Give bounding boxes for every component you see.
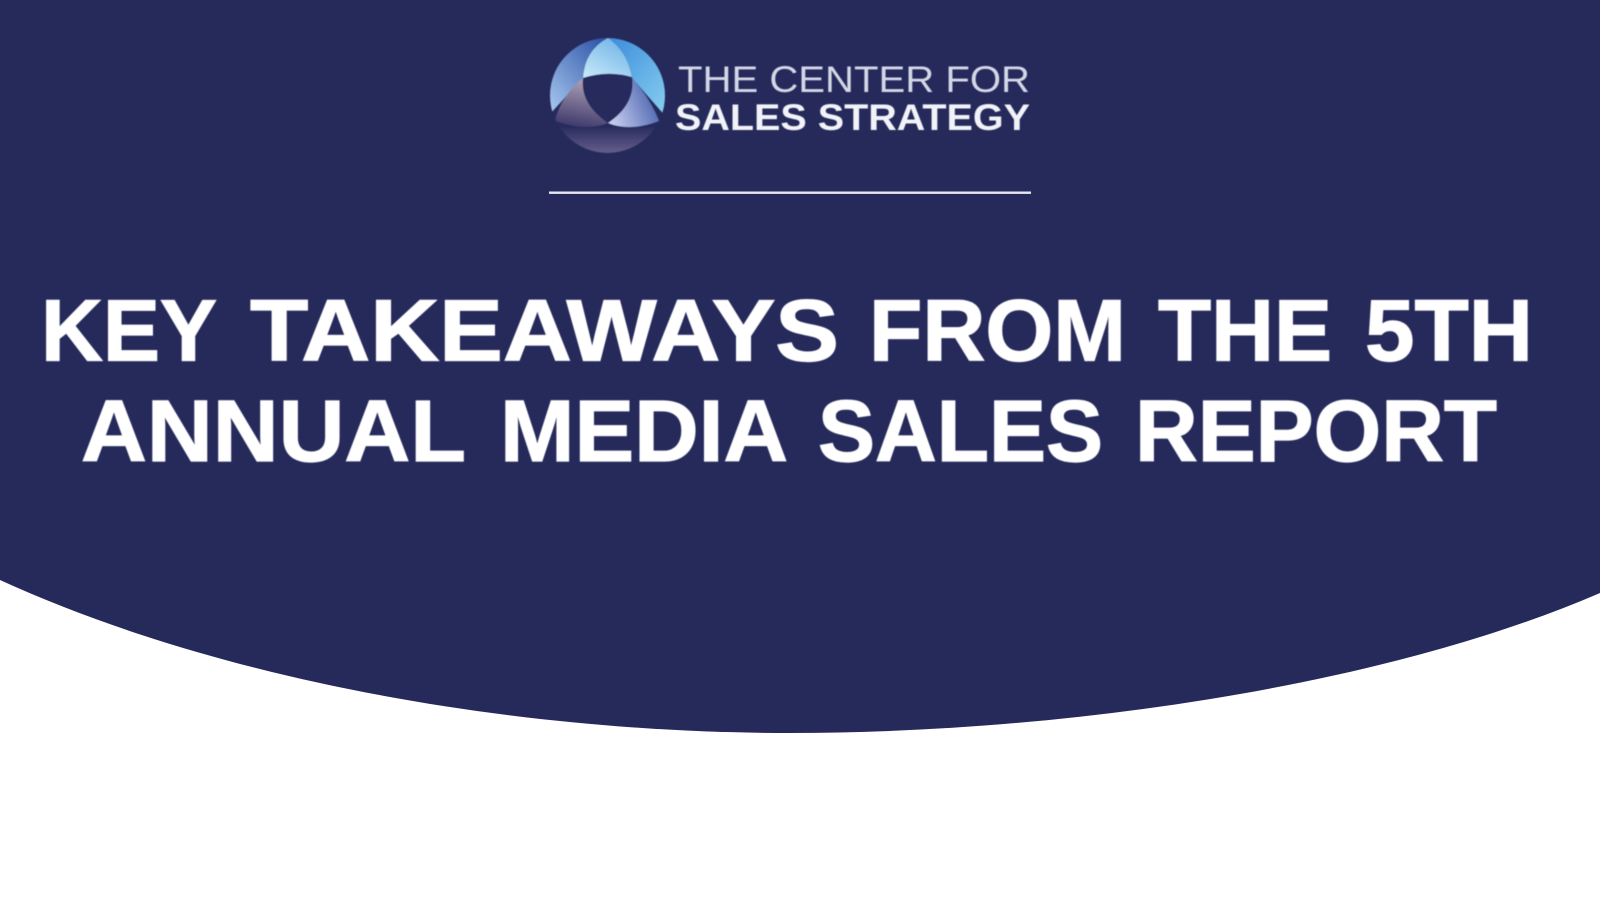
title line 2: REPORT <box>1135 383 1497 480</box>
title line 1: KEY <box>41 282 217 380</box>
title line 2: ANNUAL <box>81 383 466 480</box>
title line 1 <box>41 282 1533 380</box>
title line 1: THE <box>1158 282 1332 380</box>
logo wordmark: first line: THE CENTER FOR <box>678 59 1030 100</box>
title line 2: MEDIA <box>500 383 788 480</box>
title line 1: TAKEAWAYS <box>250 282 839 380</box>
title line 1: FROM <box>869 282 1126 380</box>
title line 1: 5TH <box>1365 282 1533 380</box>
title line 2 <box>81 383 1497 480</box>
title line 2: SALES <box>818 383 1103 480</box>
divider line <box>549 192 1031 194</box>
logo wordmark: second line: SALES STRATEGY <box>675 97 1030 138</box>
logo <box>545 38 1030 153</box>
title <box>41 282 1533 480</box>
icon: three-lens circle mark <box>545 38 670 153</box>
